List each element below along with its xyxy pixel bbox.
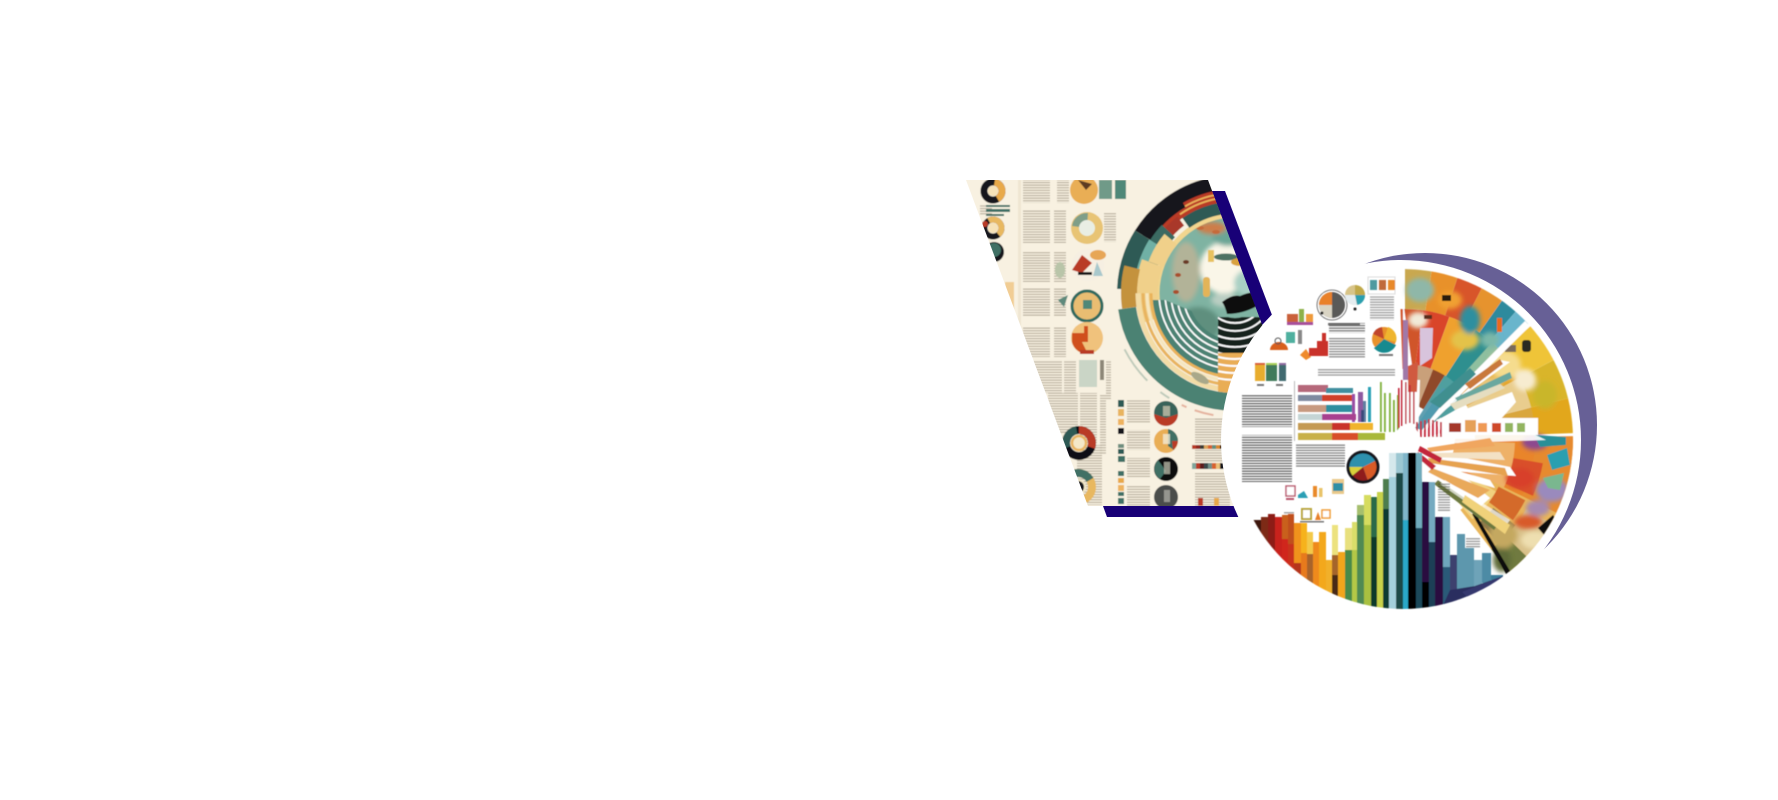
black edge of lower wedge <box>1472 514 1510 574</box>
colour donut <box>1348 452 1379 482</box>
panel: parchment infographic <box>966 180 1262 506</box>
yellow rings, lower <box>1118 292 1228 411</box>
mini pie 2 <box>1345 285 1365 310</box>
small desk icons <box>1286 479 1344 522</box>
globe <box>1159 218 1260 338</box>
white gaps between wedges <box>1400 300 1546 514</box>
wheel hub <box>1394 426 1420 452</box>
black striped sector <box>1217 316 1262 354</box>
swatch card <box>1368 277 1395 294</box>
thin vertical bars <box>1380 380 1415 432</box>
wedge: cream and olive, lower right <box>1458 472 1556 572</box>
faint arc caption <box>1124 348 1214 416</box>
food icon row <box>1440 418 1538 435</box>
small donut charts, left column <box>981 181 1014 312</box>
collage artwork <box>966 180 1597 610</box>
round vignettes, centre column <box>1055 176 1126 354</box>
text blocks <box>1242 296 1480 548</box>
orange striped sector <box>1217 352 1244 394</box>
pie with wedge <box>1372 327 1397 356</box>
wedge: yellow, right top <box>1420 326 1574 440</box>
crescent: purple ring behind wheel <box>1253 253 1597 597</box>
navy bottom band <box>1103 506 1239 517</box>
mini pie 1 <box>1317 290 1360 325</box>
text columns on parchment <box>980 180 1230 506</box>
icons and small charts, upper left of wheel <box>1242 277 1480 548</box>
navy side band <box>1212 191 1272 325</box>
small product icons <box>1270 309 1328 360</box>
fanned strips <box>1425 438 1510 534</box>
teal icon and jars <box>1497 318 1502 332</box>
icon column <box>1118 400 1125 504</box>
swatch rows <box>1192 445 1225 506</box>
colour splashes on wheel <box>1406 278 1568 572</box>
bar chart: spectrum bars at bottom of wheel <box>1253 453 1503 622</box>
teal patches <box>1547 448 1570 470</box>
purple strip and pale panel <box>1403 320 1408 380</box>
pale sketch block <box>1079 360 1097 387</box>
stepped ring segments, upper left <box>1116 180 1222 322</box>
white wheel base <box>1221 260 1581 620</box>
wedge: red and orange with blobs, right <box>1452 435 1574 522</box>
round stat badges <box>1154 401 1178 509</box>
striped ring, lower left <box>1152 299 1219 374</box>
rays <box>1415 359 1512 430</box>
panel: colour wheel <box>1241 268 1574 610</box>
three column cards <box>1255 363 1286 386</box>
horizontal bar grid <box>1294 381 1385 441</box>
large donuts, lower left <box>1062 426 1096 503</box>
red bar cluster near hub <box>1416 419 1442 470</box>
radial globe chart <box>1116 180 1262 411</box>
wedge: orange to teal, upper right <box>1400 268 1528 423</box>
